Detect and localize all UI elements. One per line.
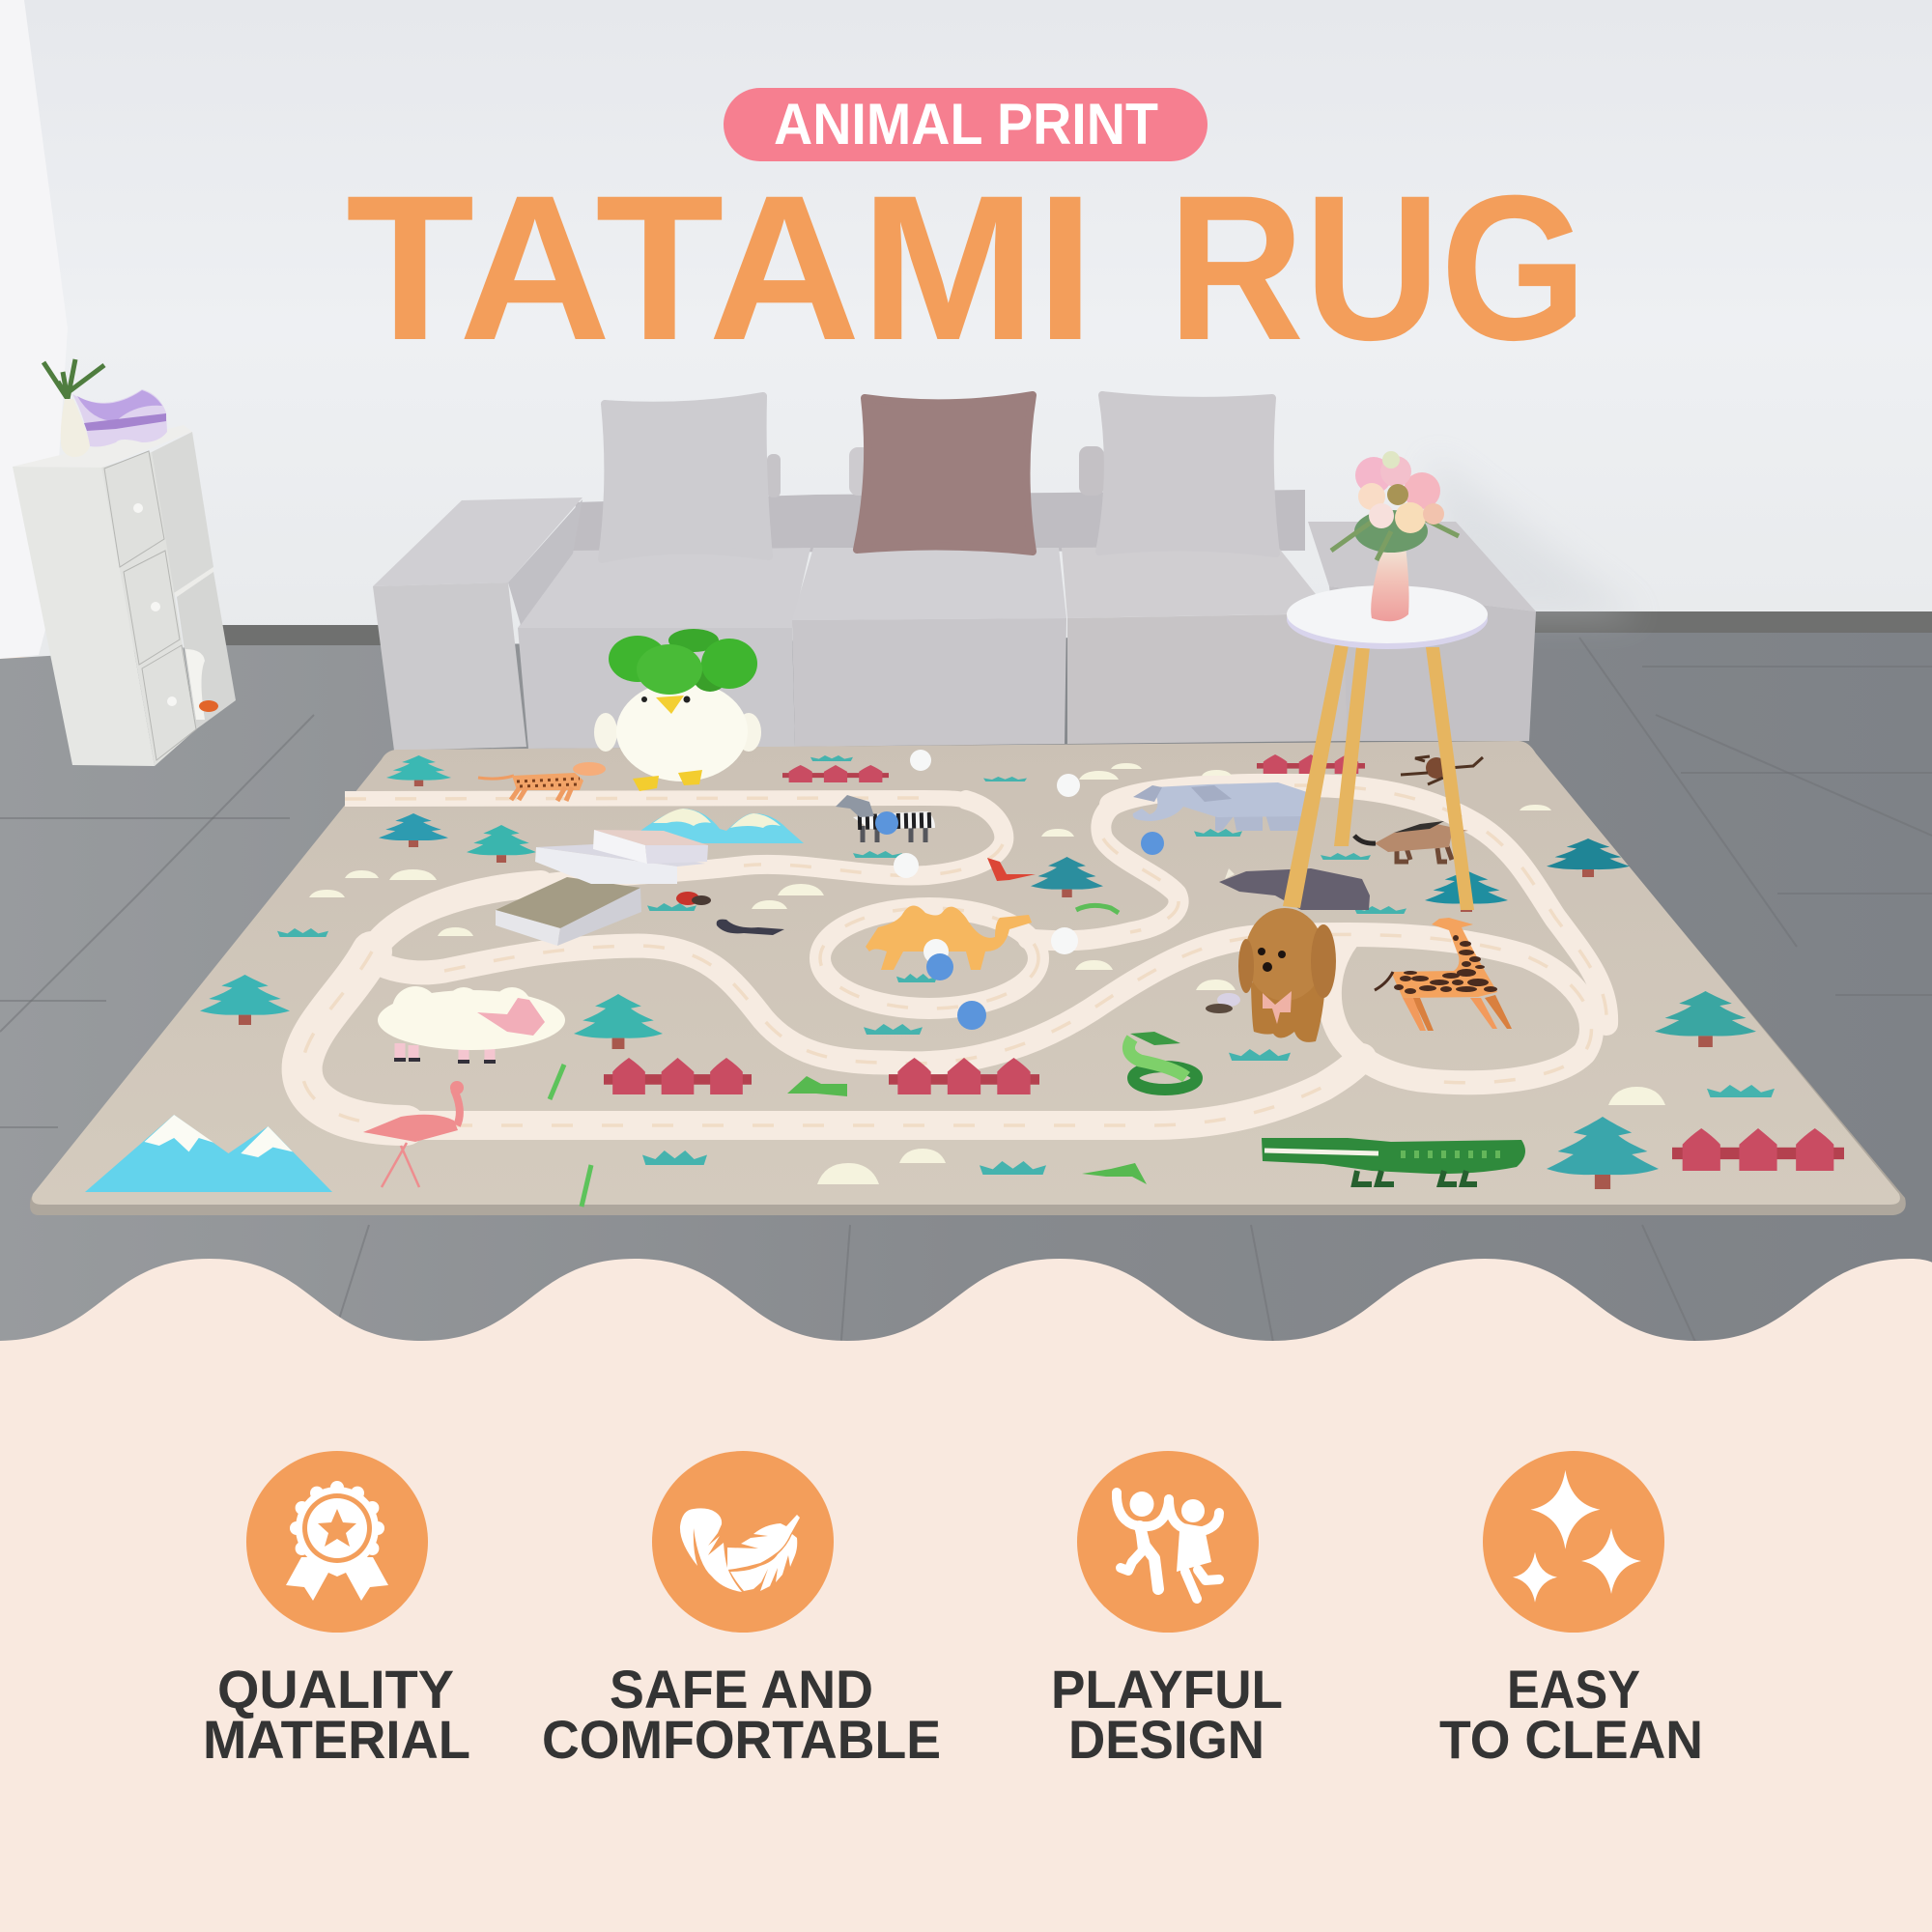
giraffe: [1375, 918, 1512, 1031]
label: playful design: DESIGN: [1068, 1709, 1264, 1770]
stack of books: [496, 830, 708, 946]
monkey: [1401, 756, 1483, 784]
hyena: [1354, 821, 1468, 862]
label: safe and comfortable: [542, 1659, 941, 1770]
seat 3: [1062, 546, 1348, 744]
pebbles: [309, 763, 1665, 1184]
shelf with decor: [13, 359, 236, 766]
label: easy to clean: TO CLEAN: [1439, 1709, 1703, 1770]
snake: [1128, 1032, 1197, 1090]
rhino: [1219, 868, 1370, 910]
sheep: [378, 986, 565, 1062]
plush in shelf: [185, 649, 205, 720]
parrot: [987, 858, 1036, 881]
grass tufts: [277, 755, 1775, 1175]
leopard: [478, 762, 606, 801]
label: safe and comfortable: COMFORTABLE: [542, 1709, 941, 1770]
title: TATAMI: [346, 153, 1094, 384]
label: quality material: [203, 1659, 470, 1770]
background: wall: [0, 0, 1932, 657]
chick plush toy: [594, 629, 761, 791]
feature: safe and comfortable: [542, 1451, 941, 1770]
book bottom: [496, 877, 641, 946]
feature: playful design: [1051, 1451, 1283, 1770]
rug: [30, 741, 1906, 1215]
icon: dancing children: [1077, 1451, 1259, 1633]
cylinder cushions: [767, 446, 1104, 497]
icon: medal: [246, 1451, 428, 1633]
road network: [302, 785, 1606, 1125]
flower bouquet: [1331, 451, 1459, 560]
fences: [604, 754, 1844, 1171]
balls: blue: [875, 811, 1164, 1030]
label: playful design: [1051, 1659, 1283, 1770]
left arm: [373, 497, 582, 751]
vase: [1371, 546, 1409, 621]
road dashes: [302, 785, 1606, 1125]
trees: [200, 755, 1756, 1189]
label: easy to clean: EASY: [1507, 1659, 1640, 1719]
rug surface: [32, 741, 1900, 1205]
title: [346, 153, 1587, 384]
caterpillar: [1076, 905, 1119, 913]
label: playful design: PLAYFUL: [1051, 1659, 1283, 1719]
back rest: [573, 490, 1305, 553]
label: safe and comfortable: SAFE AND: [610, 1659, 873, 1719]
table top: [1287, 585, 1488, 649]
book middle: [535, 844, 705, 884]
feature: quality material: [203, 1451, 470, 1770]
plush dog: [1238, 908, 1336, 1042]
baseboard: [222, 611, 1932, 645]
right arm: [1308, 522, 1536, 741]
title: RUG: [1168, 153, 1587, 384]
elephant: [1133, 782, 1307, 831]
neck pillow: [72, 389, 167, 446]
icon: sparkles: [1483, 1451, 1664, 1633]
seat 1: [518, 548, 810, 749]
mountains: [85, 809, 804, 1192]
label: quality material: QUALITY: [217, 1659, 454, 1719]
small mountains: [640, 809, 804, 843]
side table with vase and flowers: [1283, 451, 1488, 910]
seat 2: [792, 548, 1066, 747]
crocodile: [1262, 1138, 1525, 1184]
book top: [593, 830, 708, 864]
rug rim: [30, 744, 1906, 1215]
feature: easy to clean: [1439, 1451, 1703, 1770]
table legs: [1283, 645, 1474, 910]
grasshoppers and bamboo: [550, 1065, 1147, 1207]
curtain: [0, 0, 68, 659]
sofa: [373, 395, 1536, 751]
shadow on wall behind sofa: [1430, 454, 1642, 618]
label: quality material: MATERIAL: [203, 1709, 470, 1770]
fly: [1206, 993, 1240, 1013]
ladybug: [676, 892, 711, 905]
scorpion: [717, 920, 784, 935]
pillow grey left: [602, 396, 769, 559]
header pill: ANIMAL PRINT: [774, 92, 1158, 156]
balls: white: [894, 750, 1080, 964]
floor: [0, 633, 1932, 1352]
label: easy to clean: [1439, 1659, 1703, 1770]
wavy bottom panel: [0, 1259, 1932, 1932]
zebra: [836, 795, 935, 842]
shelf cabinet: [13, 425, 236, 766]
icon: feather: [652, 1451, 834, 1633]
flamingo: [363, 1081, 464, 1187]
small vase and plant: [43, 359, 104, 457]
pillow grey right: [1099, 395, 1276, 554]
pillow mauve: [857, 395, 1033, 552]
camel: [866, 906, 1032, 970]
